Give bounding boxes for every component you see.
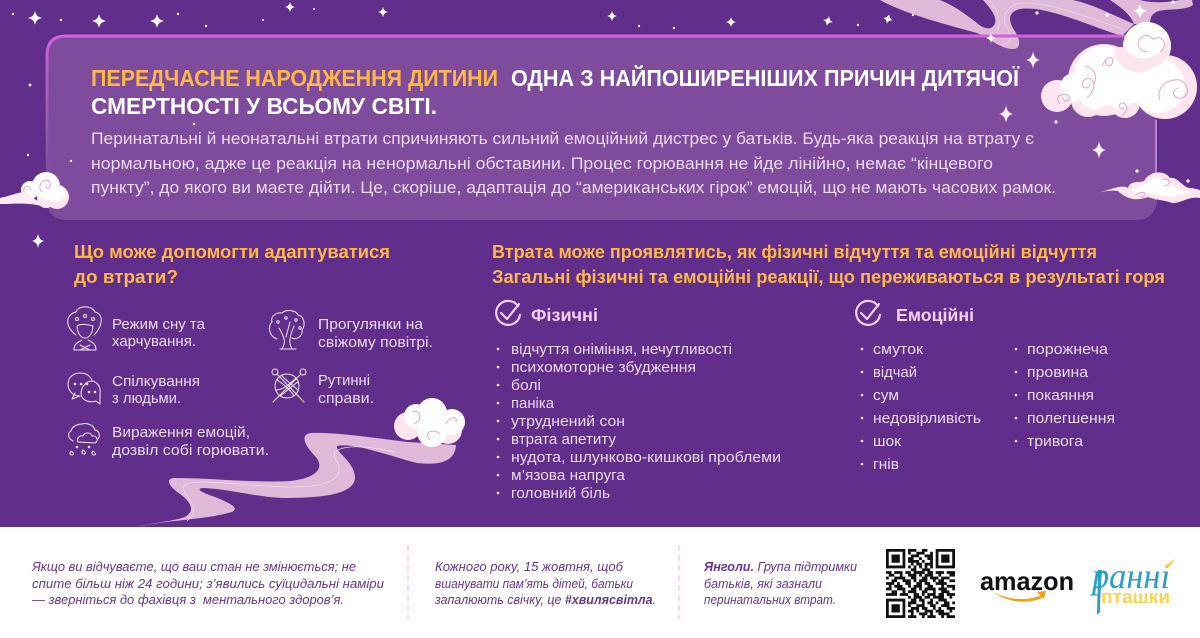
icon: check emotional [856, 301, 880, 325]
list: emotional column 1: сум [873, 387, 899, 404]
list: physical: відчуття оніміння, нечутливості [511, 341, 732, 358]
heading: adaptation: до втрати? [74, 267, 178, 287]
cloud: left small [0, 172, 69, 209]
ribbon: bottom [137, 433, 456, 527]
cloud: top right [1041, 22, 1197, 119]
heading: loss [492, 242, 1165, 287]
list: physical: психомоторне збудження [511, 359, 696, 376]
text: emotions: дозвіл собі горювати. [112, 442, 269, 459]
text: talking: з людьми. [112, 390, 181, 407]
title: ОДНА З НАЙПОШИРЕНІШИХ ПРИЧИН ДИТЯЧОЇ [511, 64, 1020, 91]
intro text: нормальною, адже це реакція на ненормальні обставини. Процес горювання не йде лінійно, немає “кінцевого [91, 154, 993, 173]
panel: intro [46, 36, 1157, 220]
footer note: support group: Янголи. Група підтримки [703, 560, 857, 574]
list: emotional column 2: порожнеча [1027, 341, 1109, 358]
icon: yarn and needles [272, 369, 306, 402]
text: emotions: Вираження емоцій, [112, 424, 250, 441]
text: sleep and food [112, 316, 206, 350]
list: emotional column 2: провина [1027, 364, 1089, 381]
list: physical: м’язова напруга [511, 467, 626, 484]
heading: loss: Загальні фізичні та емоційні реакції, що переживаються в результаті горя [492, 267, 1165, 287]
text: routine [318, 372, 374, 407]
icon: rain cloud [69, 423, 99, 455]
text: talking [112, 373, 200, 407]
text: walk [318, 316, 433, 351]
logo: early birds: ранні [1089, 556, 1170, 596]
footer note: candle [434, 560, 656, 607]
footer note: candle: запалюють свічку, це #хвилясвітла. [434, 593, 656, 607]
footer note: mental health: спите більш ніж 24 години; з’явились суїцидальні наміри [32, 577, 384, 591]
text: talking: Спілкування [112, 373, 200, 390]
list: physical: паніка [511, 395, 555, 412]
heading: physical: Фізичні [531, 305, 598, 325]
list: emotional column 2: покаяння [1027, 387, 1094, 404]
footer note: support group [703, 560, 857, 607]
intro text [91, 129, 1056, 197]
list: physical [497, 341, 781, 502]
list: emotional column 2: тривога [1027, 433, 1084, 450]
footer background [0, 527, 1200, 638]
intro text: Перинатальні й неонатальні втрати спричиняють сильний емоційний дистрес у батьків. Будь-яка реакція на втрату є [91, 129, 1034, 148]
heading: loss: Втрата може проявлятись, як фізичні відчуття та емоційні відчуття [492, 242, 1097, 262]
title [91, 64, 1020, 119]
list: physical: втрата апетиту [511, 431, 616, 448]
icon: sleep and food [68, 307, 101, 350]
text: routine: справи. [318, 390, 374, 407]
stars [12, 0, 1190, 248]
text: emotions [112, 424, 269, 459]
footer note: mental health: Якщо ви відчуваєте, що ваш стан не змінюється; не [31, 560, 356, 574]
text: routine: Рутинні [318, 372, 370, 389]
footer note: mental health [31, 560, 384, 607]
text: walk: свіжому повітрі. [318, 334, 433, 351]
list: emotional column 2: полегшення [1027, 410, 1115, 427]
list: emotional column 1: недовірливість [873, 410, 981, 427]
text: walk: Прогулянки на [318, 316, 424, 333]
heading: emotional: Емоційні [896, 305, 974, 325]
footer note: support group: батьків, які зазнали [704, 577, 822, 591]
list: emotional column 1 [861, 341, 981, 473]
icon: speech bubbles [68, 373, 100, 404]
list: physical: болі [511, 377, 541, 394]
footer note: mental health: — зверніться до фахівця з ментального здоров’я. [31, 593, 344, 607]
title: ПЕРЕДЧАСНЕ НАРОДЖЕННЯ ДИТИНИ [91, 65, 498, 91]
footer note: candle: вшанувати пам’ять дітей, батьки [435, 577, 633, 591]
cloud: right small [1097, 172, 1200, 203]
footer note: candle: Кожного року, 15 жовтня, щоб [435, 560, 624, 574]
footer note: support group: перинатальних втрат. [704, 593, 836, 607]
list: emotional column 1: смуток [873, 341, 923, 358]
logo: early birds: пташки [1101, 587, 1170, 607]
list: emotional column 1: гнів [873, 456, 899, 473]
list: emotional column 2 [1015, 341, 1115, 450]
icon: check physical [496, 301, 520, 325]
text: sleep and food: Режим сну та [112, 316, 206, 333]
QR code [886, 550, 955, 617]
list: physical: нудота, шлунково-кишкові проблеми [511, 449, 781, 466]
logo: early birds [1089, 556, 1175, 615]
heading: adaptation: Що може допомогти адаптуватися [74, 242, 390, 262]
title: СМЕРТНОСТІ У ВСЬОМУ СВІТІ. [91, 93, 437, 119]
list: physical: утруднений сон [511, 413, 625, 430]
icon: walk tree [269, 311, 304, 349]
list: physical: головний біль [511, 485, 610, 502]
intro text: пункту”, до якого ви маєте дійти. Це, скоріше, адаптація до “американських гірок” емоцій, що не мають часових рамок. [91, 178, 1056, 197]
text: sleep and food: харчування. [112, 333, 196, 350]
heading: adaptation [74, 242, 390, 287]
top ribbons [880, 0, 1193, 49]
logo: amazon: amazon [980, 566, 1074, 596]
cloud: bottom [394, 398, 465, 447]
list: emotional column 1: відчай [873, 364, 917, 381]
list: emotional column 1: шок [873, 433, 901, 450]
